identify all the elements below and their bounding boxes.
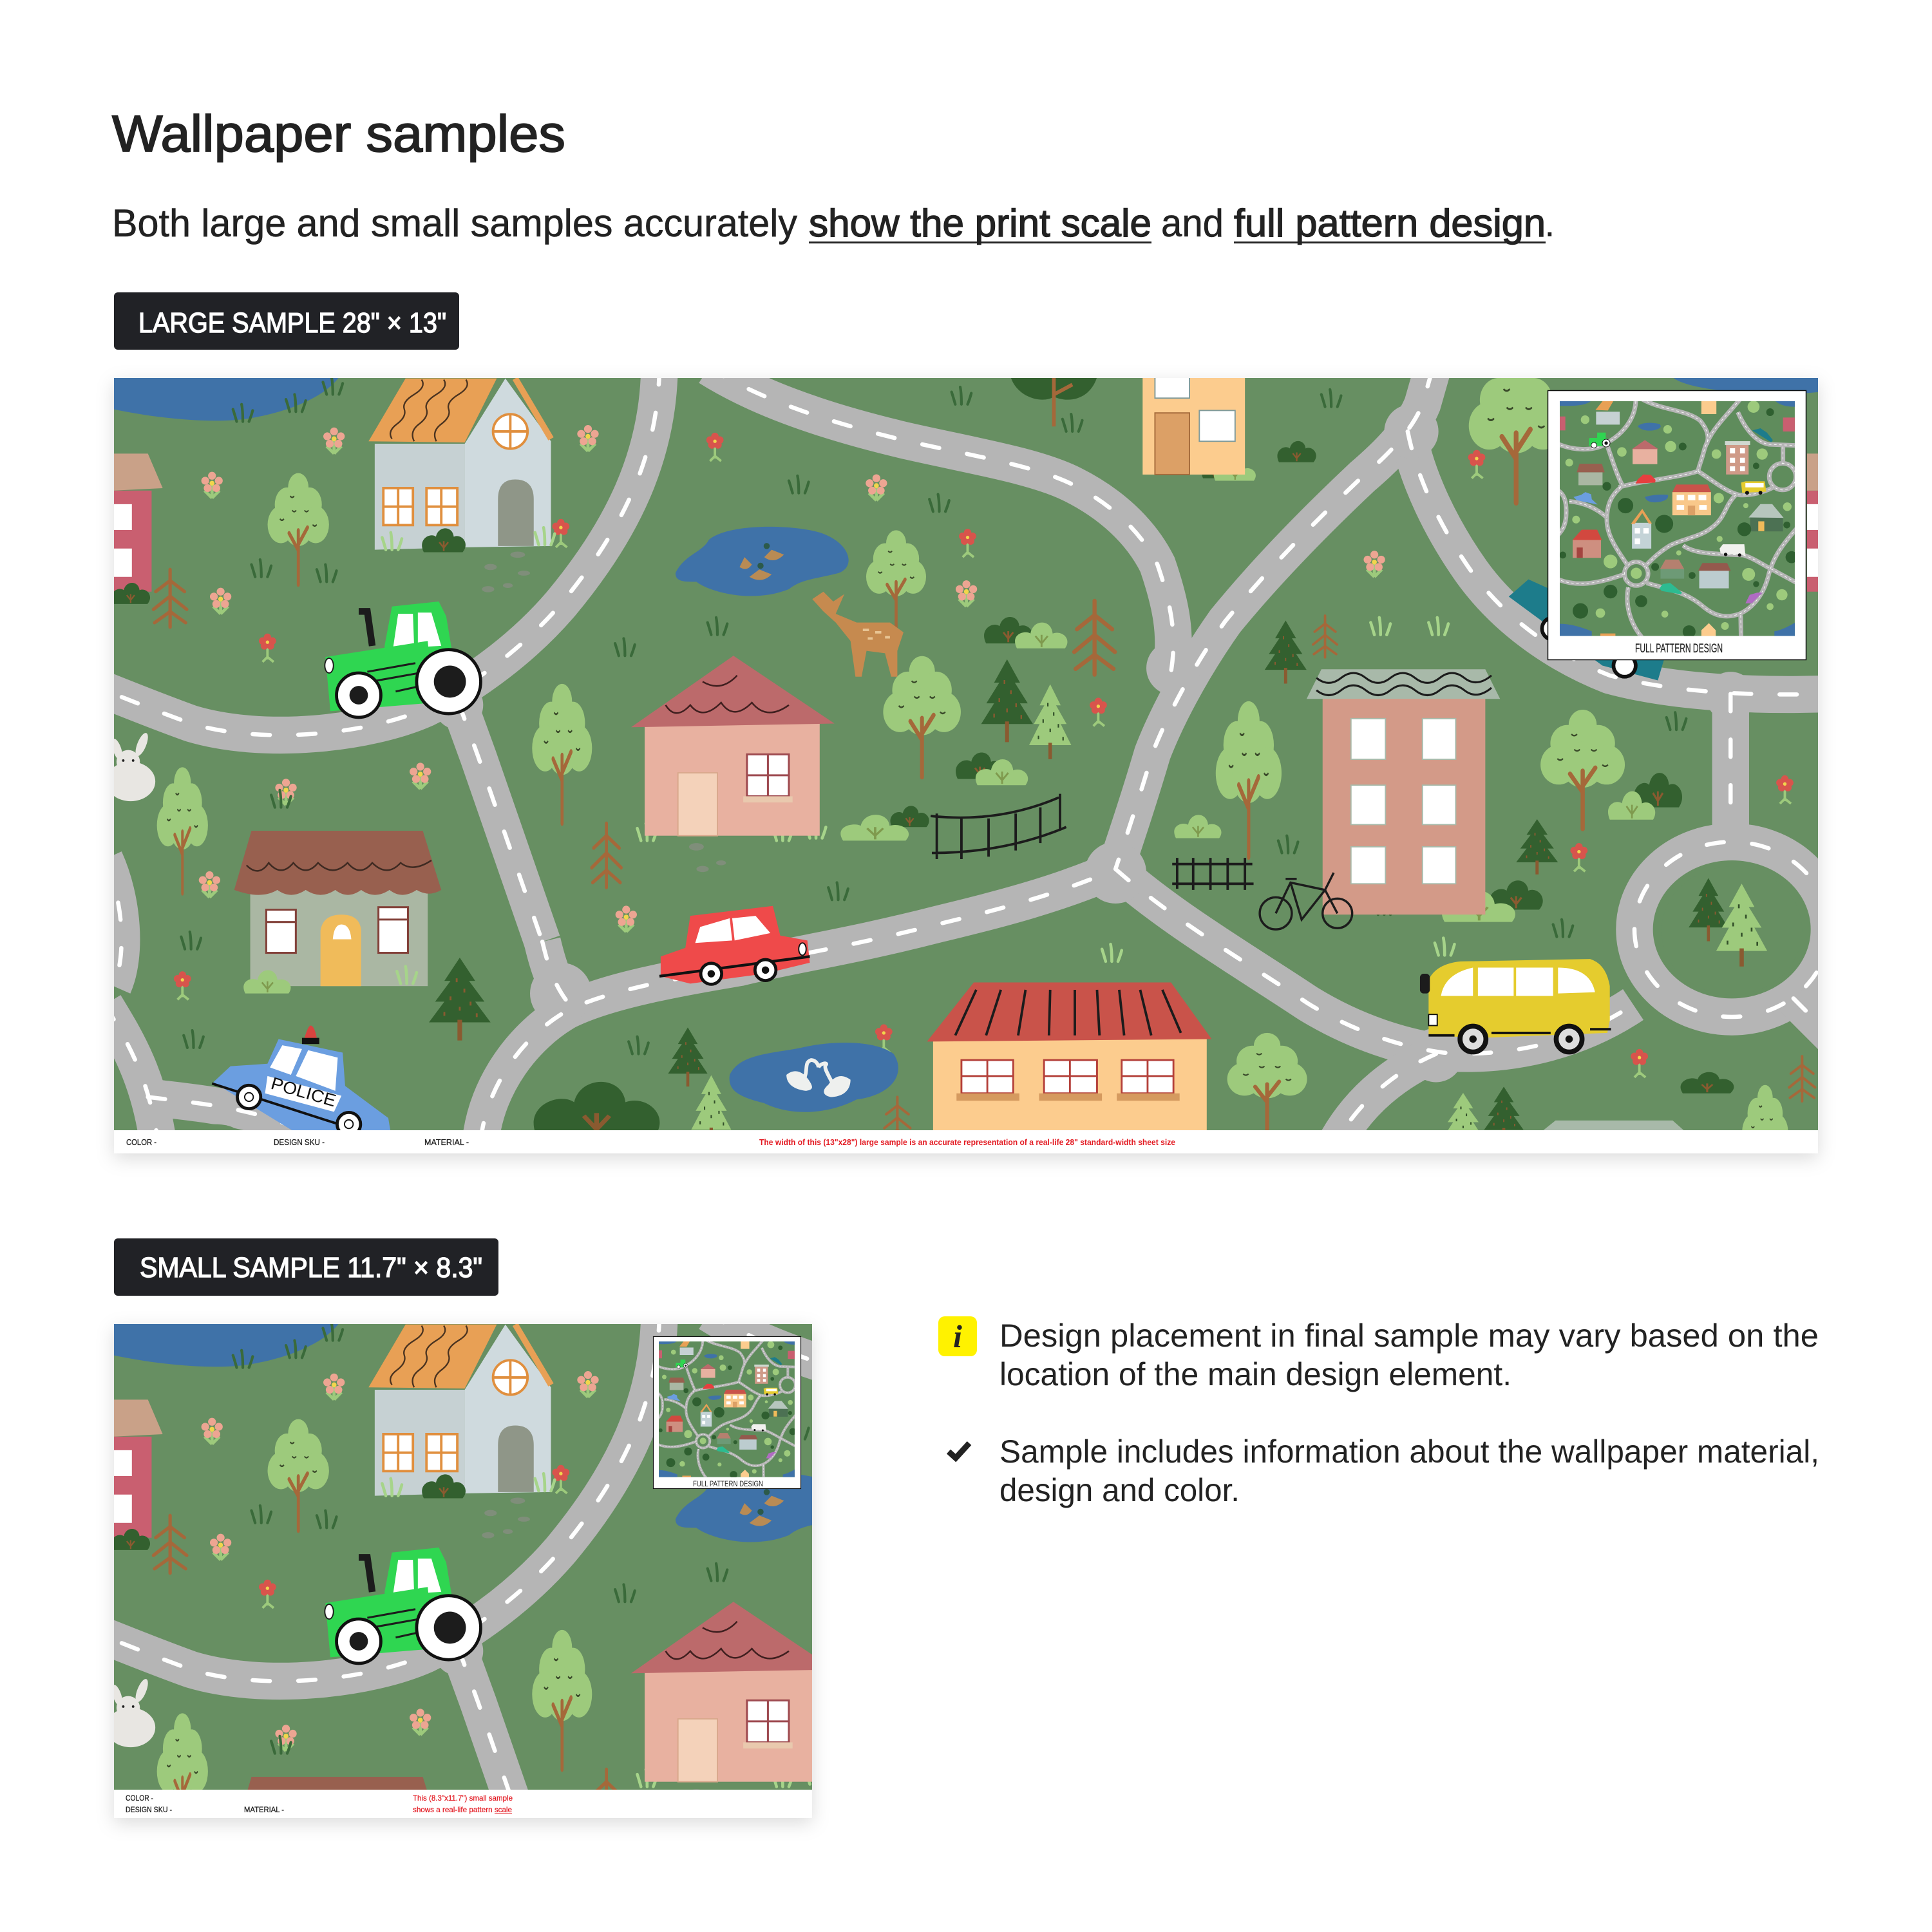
icon: info — [938, 1316, 977, 1356]
roads — [105, 367, 1837, 1159]
caption strip: small sample: shows a real-life pattern scale — [413, 1805, 512, 1814]
yellow school bus — [1420, 959, 1611, 1052]
title: Wallpaper samples — [112, 105, 565, 162]
mini dark trees — [1559, 408, 1797, 638]
pine trees — [429, 601, 1815, 1148]
caption strip: small sample: MATERIAL - — [244, 1805, 284, 1814]
caption strip: large sample: The width of this (13"x28") large sample is an accurate representation of a real-life 28" standard-width sheet size — [759, 1137, 1175, 1147]
bicycle — [1260, 873, 1352, 929]
bushes — [111, 528, 466, 604]
caption strip: large sample: DESIGN SKU - — [274, 1137, 325, 1147]
inset: full pattern design (small) — [653, 1337, 801, 1489]
pink house on the right edge — [1807, 453, 1819, 592]
more bushes — [243, 441, 1734, 1140]
note: sample information — [999, 1434, 1819, 1508]
caption strip: large sample: COLOR - — [126, 1137, 156, 1147]
inset: full pattern design (small): FULL PATTERN DESIGN — [693, 1481, 763, 1488]
lower walls of brown roof house — [251, 885, 428, 986]
pink house in the centre — [631, 656, 835, 836]
note: design placement: location of the main design element. — [999, 1356, 1511, 1392]
more flowers — [174, 450, 1794, 1077]
subtitle with emphasised phrases — [112, 202, 1555, 245]
note: sample information: Sample includes information about the wallpaper material, — [999, 1434, 1819, 1470]
upper-left scene elements shared with the small sample — [106, 377, 849, 949]
police car: POLICE — [269, 1074, 338, 1110]
small fence — [1172, 858, 1254, 890]
icon: info: i — [953, 1318, 962, 1354]
caption strip: small sample: This (8.3"x11.7") small sample — [413, 1794, 513, 1803]
caption strip: small sample: DESIGN SKU - — [126, 1805, 172, 1814]
stepping stones — [482, 552, 726, 872]
caption strip: small sample — [114, 1790, 812, 1818]
pond with ducks — [676, 527, 849, 596]
rabbit — [106, 732, 155, 801]
pink house on the left edge — [113, 453, 163, 592]
grey roof at the bottom edge — [1543, 1121, 1684, 1130]
small firs — [153, 569, 621, 887]
subtitle with emphasised phrases: Both large and small samples accurately — [112, 202, 797, 245]
grey house with orange roof — [368, 379, 551, 550]
panel: small sample — [105, 1313, 1173, 1895]
caption strip: small sample: COLOR - — [126, 1794, 153, 1803]
more trees — [866, 359, 1788, 1186]
cropped road map — [105, 1313, 1173, 1895]
trees — [157, 473, 592, 893]
badge: small sample: SMALL SAMPLE 11.7" × 8.3" — [140, 1252, 482, 1283]
peach house at the top — [1142, 377, 1245, 475]
note: design placement: Design placement in final sample may vary based on the — [999, 1318, 1819, 1354]
orange building with red roof — [927, 982, 1211, 1133]
mini vehicles — [1573, 428, 1773, 603]
subtitle with emphasised phrases: full pattern design — [1234, 202, 1546, 245]
more grass tufts — [184, 387, 1686, 1054]
police car — [212, 1025, 392, 1140]
panel: large sample — [105, 359, 1837, 1186]
caption strip: large sample: MATERIAL - — [424, 1137, 469, 1147]
icon: check mark — [949, 1443, 969, 1458]
badge: small sample — [114, 1238, 498, 1296]
badge: large sample — [114, 292, 459, 350]
note: design placement — [999, 1318, 1819, 1392]
inset caption: FULL PATTERN DESIGN — [1635, 642, 1723, 656]
flowers — [199, 425, 724, 932]
deer — [812, 592, 904, 677]
fence by the road — [931, 794, 1066, 859]
tall pink apartment building — [1307, 669, 1500, 914]
badge: large sample: LARGE SAMPLE 28" × 13" — [138, 307, 446, 339]
subtitle with emphasised phrases: and — [1161, 202, 1224, 245]
mini houses — [1560, 401, 1795, 636]
caption strip: large sample — [114, 1130, 1818, 1153]
subtitle with emphasised phrases: . — [1544, 202, 1555, 245]
red car — [659, 906, 810, 984]
subtitle with emphasised phrases: show the print scale — [809, 202, 1151, 245]
mini trees — [1566, 401, 1792, 630]
illustrated road map — [114, 378, 1818, 1130]
miniature full pattern map — [1557, 399, 1797, 638]
tractor — [325, 601, 480, 717]
teal car behind the inset — [1509, 580, 1664, 681]
grass tufts — [181, 377, 848, 949]
brown roof — [234, 831, 441, 895]
swan pond — [730, 1043, 898, 1112]
inset: full pattern design — [1548, 390, 1806, 659]
note: sample information: design and color. — [999, 1472, 1240, 1508]
